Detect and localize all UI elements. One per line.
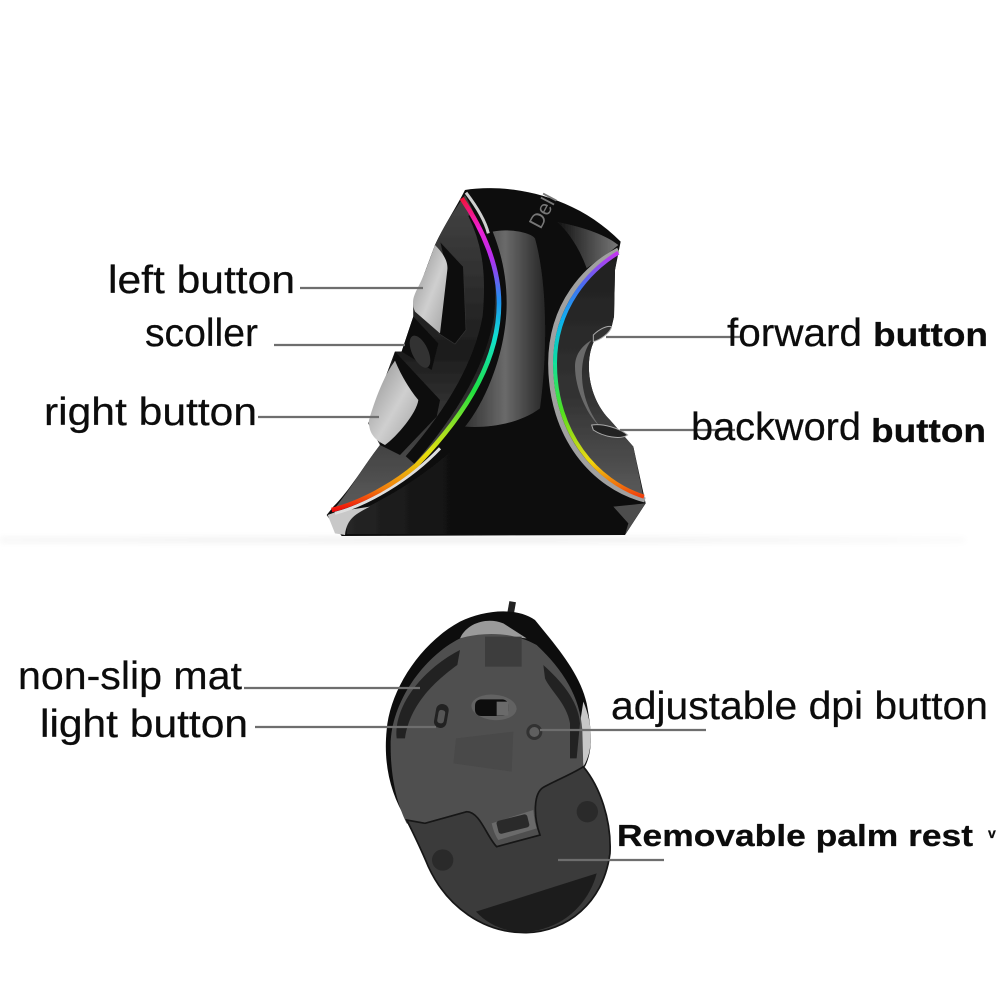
center glossy inset bbox=[465, 230, 545, 427]
right gray panel bbox=[554, 250, 643, 497]
base shading bbox=[347, 433, 507, 534]
label: backward button: backword bbox=[691, 406, 861, 449]
base highlight right bbox=[613, 503, 645, 535]
backward side button bbox=[592, 425, 628, 437]
top pad bbox=[485, 637, 522, 667]
logo: Dell bbox=[525, 190, 562, 232]
thumb groove bbox=[575, 340, 600, 427]
rainbow arc right bbox=[555, 253, 644, 497]
label: forward button: forward bbox=[727, 312, 862, 355]
cable bbox=[507, 602, 513, 632]
black strip beside arc bbox=[410, 213, 490, 460]
base highlight left bbox=[328, 507, 370, 535]
non-slip mat right bbox=[543, 665, 580, 758]
center pad bbox=[453, 732, 513, 772]
rainbow arc right silver edge bbox=[551, 250, 645, 500]
base plate bbox=[391, 634, 583, 853]
label: backward button bold: button bbox=[871, 412, 986, 449]
mouse body bbox=[327, 188, 646, 536]
palm rest pad bbox=[476, 873, 597, 932]
label: non-slip mat: non-slip mat bbox=[18, 655, 242, 698]
non-slip mat left bbox=[396, 650, 460, 738]
palm rest foot left bbox=[432, 849, 453, 871]
label: scroller: scoller bbox=[145, 312, 258, 355]
label: adjustable dpi button: adjustable dpi button bbox=[611, 685, 988, 728]
left button bbox=[413, 242, 466, 344]
label: light button: light button bbox=[40, 703, 248, 746]
left gray panel bbox=[333, 195, 498, 510]
stray mark: v bbox=[988, 825, 996, 841]
top highlight bbox=[460, 621, 527, 638]
label: removable palm rest: Removable palm rest bbox=[617, 818, 973, 853]
label: right button: right button bbox=[44, 391, 257, 434]
forward side button bbox=[593, 326, 612, 342]
silver edge bbox=[580, 702, 591, 767]
label: forward button bold: button bbox=[873, 316, 988, 353]
palm rest notch trim bbox=[492, 810, 537, 840]
scroller bbox=[402, 317, 438, 371]
slide switch window bbox=[470, 693, 518, 722]
light switch bbox=[433, 703, 450, 729]
leader lines bbox=[244, 288, 740, 860]
ground shadow bbox=[0, 537, 965, 543]
label: left button: left button bbox=[108, 259, 295, 302]
outer shell bbox=[386, 611, 591, 820]
top sheen bbox=[557, 222, 618, 268]
dpi button bbox=[526, 724, 542, 740]
right button bbox=[369, 352, 440, 455]
product image: mouse side view bbox=[327, 188, 646, 536]
rainbow arc left bottom silver edge bbox=[335, 448, 440, 513]
product image: mouse underside bbox=[386, 602, 610, 933]
rainbow arc left bbox=[332, 198, 499, 510]
palm rest bbox=[407, 767, 610, 933]
palm rest foot right bbox=[577, 801, 598, 822]
rainbow arc left top silver edge bbox=[466, 193, 488, 233]
